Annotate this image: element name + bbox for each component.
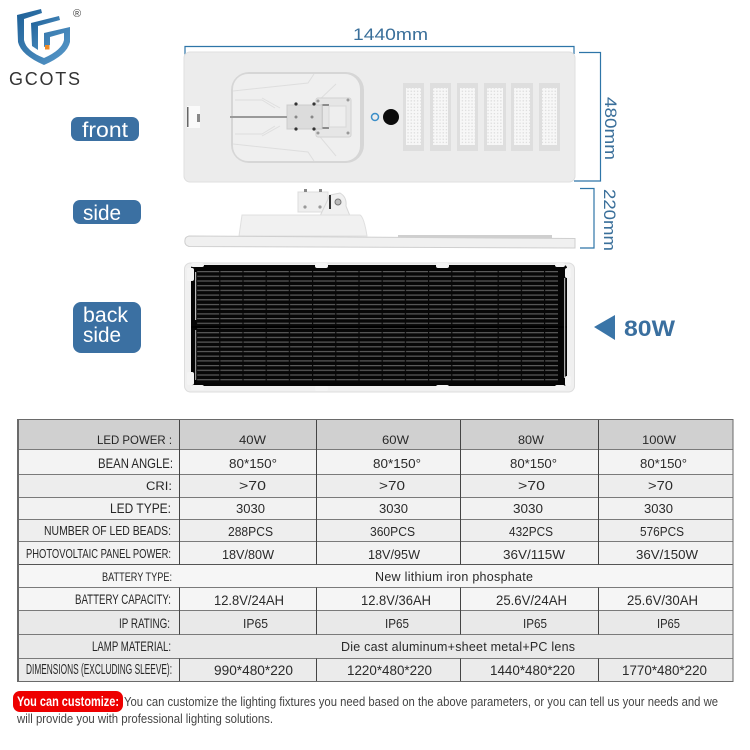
column: 40W: 40W <box>239 435 266 447</box>
column: 80W: 36V/115W <box>503 548 565 562</box>
nameplate <box>187 106 200 128</box>
column: 40W: IP65 <box>243 617 268 631</box>
column: 100W: 576PCS <box>640 525 684 539</box>
column: 100W: 80*150° <box>640 457 687 471</box>
logo wordmark: GCOTS <box>9 69 80 89</box>
column: 100W: >70 <box>648 479 673 493</box>
icon: left arrow <box>594 315 615 340</box>
column: 60W: 3030 <box>379 502 408 516</box>
row labels: PHOTOVOLTAIC PANEL POWER: <box>26 546 171 561</box>
row labels: BEAN ANGLE: <box>98 455 173 471</box>
column: 40W <box>214 435 293 678</box>
power indicator: 80W: 80W <box>624 316 675 341</box>
label: side: side <box>83 202 121 225</box>
column: 60W: IP65 <box>385 617 409 631</box>
dimension: height 480mm: 480mm <box>601 97 620 160</box>
row labels: BATTERY CAPACITY: <box>75 591 171 607</box>
badge: you can customize <box>13 691 123 712</box>
table rows <box>18 420 733 682</box>
column: 60W: 12.8V/36AH <box>361 593 431 608</box>
label: back side: side <box>83 324 121 347</box>
row labels: DIMENSIONS (EXCLUDING SLEEVE): <box>26 662 172 678</box>
row labels: LED TYPE: <box>110 500 171 516</box>
lamp front view <box>184 52 575 182</box>
dimension: width 1440mm: 1440mm <box>353 25 428 44</box>
column: 100W: IP65 <box>657 617 680 631</box>
column: 80W: 3030 <box>513 502 543 516</box>
column: 80W: 1440*480*220 <box>490 662 575 678</box>
column: 80W: 25.6V/24AH <box>496 593 567 608</box>
row labels: NUMBER OF LED BEADS: <box>44 523 171 538</box>
column: 40W: 80*150° <box>229 457 277 471</box>
dimension: depth 220mm: 220mm <box>600 189 619 251</box>
column: 40W: 990*480*220 <box>214 662 293 678</box>
dimension: depth 220mm <box>580 188 619 251</box>
column: 60W: 60W <box>382 435 409 447</box>
logo: GCOTS <box>9 8 81 89</box>
small logo <box>372 114 378 120</box>
customization note <box>13 691 718 726</box>
row labels <box>26 435 173 678</box>
base plate <box>185 236 575 248</box>
sensor <box>383 109 399 125</box>
label: side <box>73 200 141 225</box>
lamp back view: solar panel <box>184 263 574 392</box>
column: 80W <box>490 435 575 678</box>
row labels: BATTERY TYPE: <box>102 570 172 584</box>
label: back side <box>73 302 141 353</box>
LED modules <box>403 83 560 151</box>
bracket <box>298 189 350 216</box>
column: 60W <box>347 435 432 678</box>
row labels: CRI: <box>146 479 172 493</box>
icon: shield <box>17 9 70 65</box>
column: 100W: 25.6V/30AH <box>627 593 698 608</box>
housing <box>231 72 364 163</box>
note line 2: will provide you with professional lighting solutions. <box>16 711 273 726</box>
label: back side: back <box>83 304 129 327</box>
row labels: IP RATING: <box>119 615 170 631</box>
badge: you can customize: You can customize: <box>17 694 119 709</box>
column: 40W: >70 <box>239 479 266 493</box>
frame tabs <box>187 263 571 391</box>
power indicator: 80W <box>594 315 675 341</box>
icon: orange square <box>45 45 50 50</box>
merged cell: battery type: New lithium iron phosphate <box>375 570 533 584</box>
mounting bracket <box>230 98 351 137</box>
column: 60W: 80*150° <box>373 457 421 471</box>
column: 60W: 1220*480*220 <box>347 662 432 678</box>
registered mark: ® <box>73 8 81 20</box>
column: 40W: 12.8V/24AH <box>214 593 284 608</box>
column: 60W: 18V/95W <box>368 548 420 562</box>
column: 100W: 1770*480*220 <box>622 662 707 678</box>
dimension: width 1440mm <box>185 25 574 72</box>
row labels: LAMP MATERIAL: <box>92 638 171 654</box>
column: 80W: 432PCS <box>509 525 553 539</box>
thin panel top <box>398 235 552 238</box>
table grid <box>18 419 733 682</box>
column: 40W: 3030 <box>236 502 265 516</box>
label: front <box>71 117 139 142</box>
column: 40W: 18V/80W <box>222 548 274 562</box>
specification table <box>18 419 733 682</box>
column: 80W: IP65 <box>523 617 547 631</box>
label: front: front <box>82 119 128 142</box>
column: 100W: 36V/150W <box>636 548 698 562</box>
column: 60W: >70 <box>379 479 405 493</box>
column: 80W: 80W <box>518 435 544 447</box>
lamp side view <box>185 189 575 248</box>
housing <box>239 215 367 236</box>
column: 100W <box>622 435 707 678</box>
column: 80W: >70 <box>518 479 545 493</box>
column: 40W: 288PCS <box>228 525 273 539</box>
column: 60W: 360PCS <box>370 525 415 539</box>
column: 80W: 80*150° <box>510 457 557 471</box>
column: 100W: 3030 <box>644 502 673 516</box>
row labels: LED POWER : <box>97 435 172 447</box>
dimension: height 480mm <box>574 52 620 181</box>
merged cell: lamp material: Die cast aluminum+sheet metal+PC lens <box>341 640 575 654</box>
column: 100W: 100W <box>642 435 676 447</box>
